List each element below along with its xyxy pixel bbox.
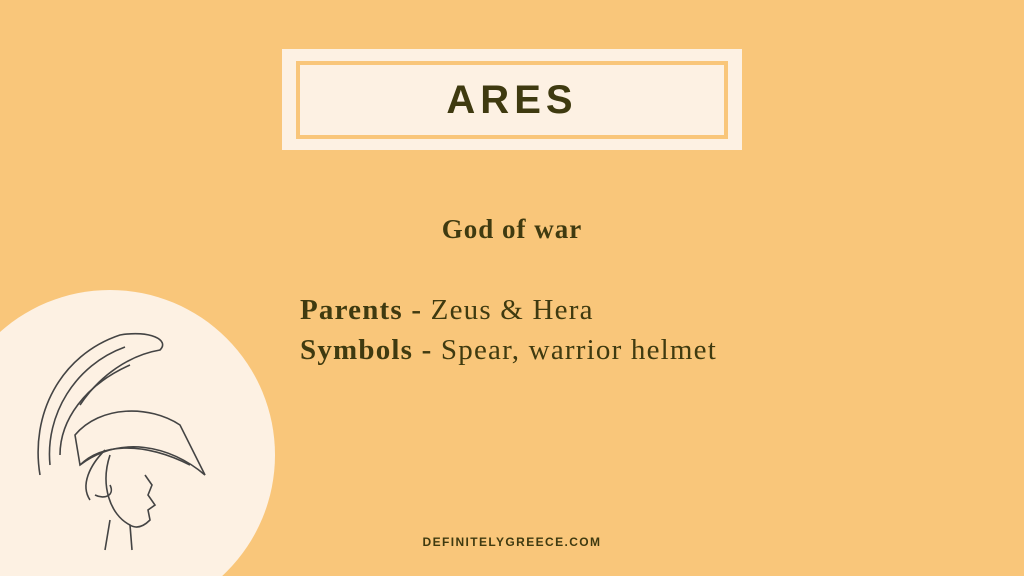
facts text block <box>300 294 717 366</box>
title box <box>282 49 742 150</box>
subtitle: God of war: God of war <box>442 214 582 244</box>
title text: ARES <box>446 78 578 122</box>
facts text block: Symbols - Spear, warrior helmet <box>300 334 717 366</box>
footer: website: DEFINITELYGREECE.COM <box>423 535 601 549</box>
title inner frame <box>296 61 728 139</box>
icon: helmeted head <box>37 332 206 550</box>
circle background <box>0 290 275 576</box>
facts text block: Parents - Zeus & Hera <box>300 294 594 326</box>
